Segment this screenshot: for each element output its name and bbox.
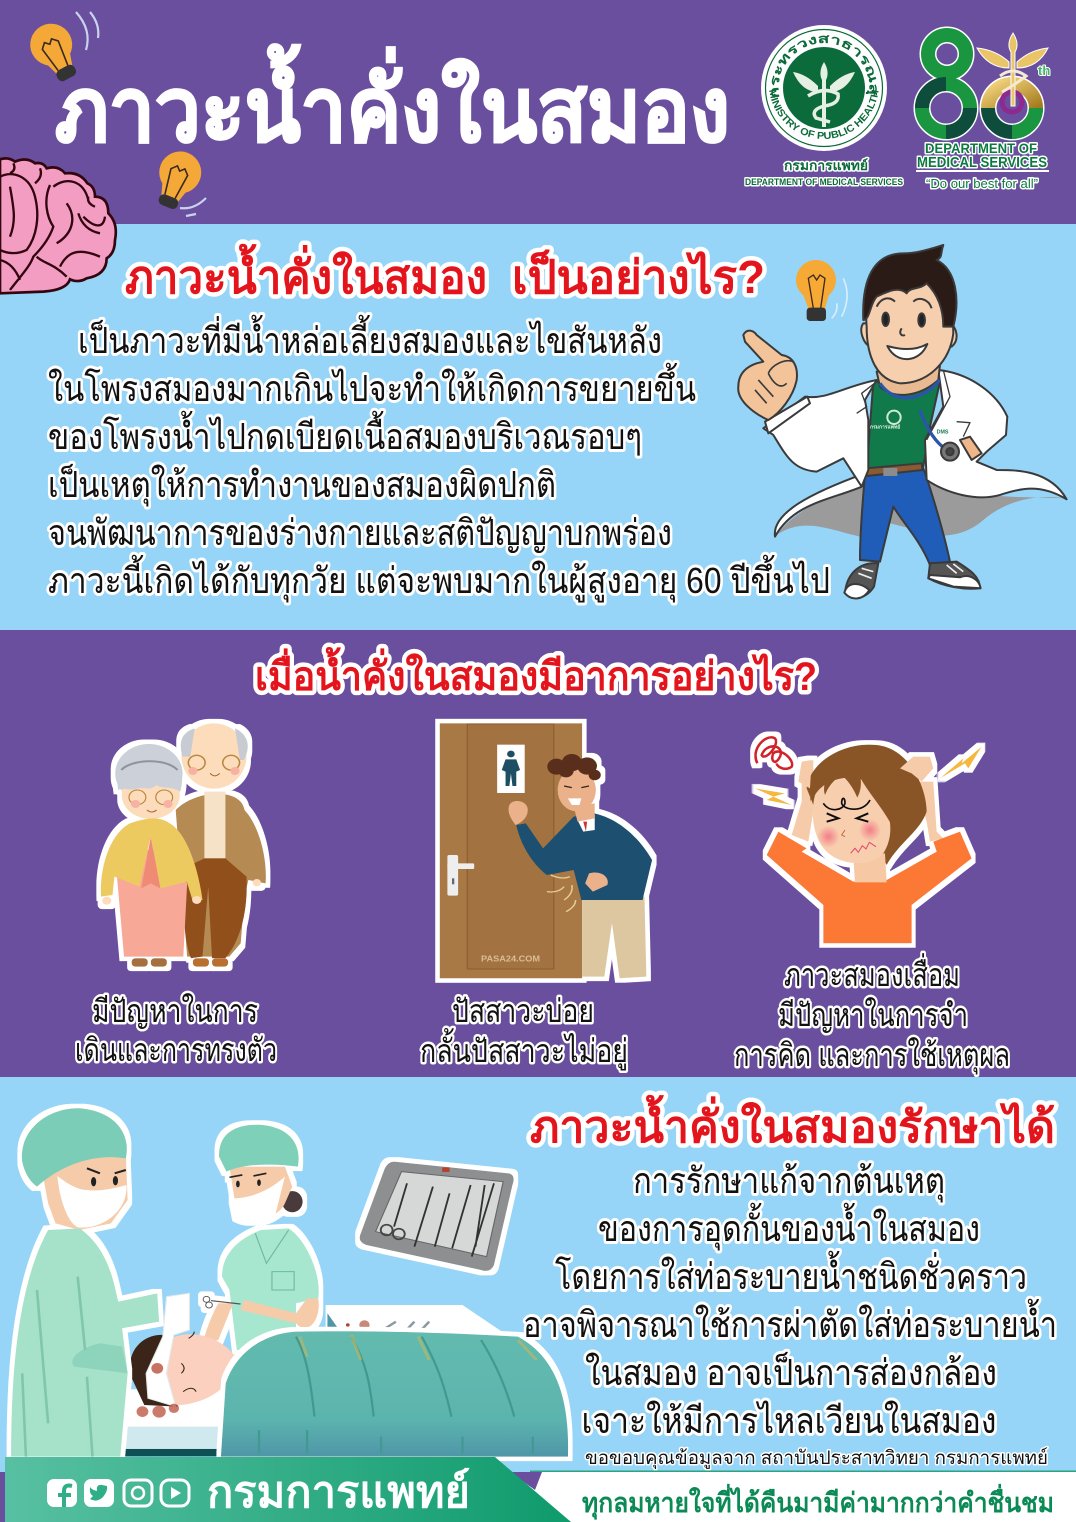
- background: what-is panel: [0, 224, 1076, 630]
- caption: dementia: ภาวะสมองเสื่อม: [784, 953, 960, 993]
- surgical tray: [360, 1162, 514, 1271]
- footer: purple accent: [0, 1472, 542, 1522]
- footer: white band: [505, 1472, 1076, 1522]
- logo: 80th anniversary: DEPARTMENT OF: [925, 140, 1037, 156]
- logo: 80th anniversary: “Do our best for all”: [926, 176, 1038, 191]
- illustration: man at toilet door: [440, 723, 652, 978]
- heading: what is hydrocephalus: ภาวะน้ำคั่งในสมอง: [125, 243, 487, 303]
- drape: [221, 1331, 568, 1457]
- logo: 80th anniversary: [916, 33, 1050, 191]
- heading: what is hydrocephalus: เป็นอย่างไร?: [512, 249, 765, 303]
- illustration: doctor mascot with bulb: กรมการแพทย์: [870, 423, 900, 430]
- text block: description: จนพัฒนาการของร่างกายและสติปัญญาบกพร่อง: [48, 512, 672, 553]
- illustration: doctor mascot with bulb: DMS: [937, 429, 949, 435]
- heading: what is hydrocephalus: [125, 243, 765, 303]
- text block: description: เป็นเหตุให้การทำงานของสมองผิดปกติ: [48, 462, 556, 507]
- text block: treatment: ของการอุดกั้นของน้ำในสมอง: [598, 1202, 980, 1251]
- caption: balance problems: เดินและการทรงตัว: [75, 1032, 277, 1068]
- text block: treatment: เจาะให้มีการไหลเวียนในสมอง: [582, 1400, 996, 1441]
- footer: green banner: [5, 1457, 571, 1522]
- background: treatment panel: [0, 1077, 1076, 1472]
- heading: what symptoms: เมื่อน้ำคั่งในสมองมีอาการอย่างไร?: [255, 647, 817, 699]
- icons: social media: [47, 1479, 189, 1507]
- text block: treatment: การรักษาแก้จากต้นเหตุ: [633, 1160, 945, 1203]
- caption: dementia: [734, 953, 1010, 1075]
- logo: 80th anniversary: MEDICAL SERVICES: [917, 154, 1047, 171]
- illustration: doctor mascot with bulb: [738, 245, 1067, 599]
- caption: dementia: การคิด และการใช้เหตุผล: [734, 1037, 1010, 1075]
- text block: description: เป็นภาวะที่มีน้ำหล่อเลี้ยงสมองและไขสันหลัง: [78, 314, 662, 361]
- nurse: [203, 1125, 319, 1350]
- logo: ministry of public health seal: DEPARTMENT OF MEDICAL SERVICES: [745, 177, 903, 188]
- caption: urination: [420, 993, 628, 1071]
- caption: urination: ปัสสาวะบ่อย: [452, 993, 594, 1029]
- text block: description: ภาวะนี้เกิดได้กับทุกวัย แต่จะพบมากในผู้สูงอายุ 60 ปีขึ้นไป: [48, 554, 830, 603]
- caption: balance problems: [75, 993, 277, 1068]
- background: symptoms panel: [0, 630, 1076, 1077]
- icon: light bulb by doctor: [796, 260, 847, 321]
- logo: ministry of public health seal: MINISTRY OF PUBLIC HEALTH: [769, 90, 879, 139]
- bed: [98, 1387, 222, 1456]
- door: PASA24.COM: [481, 954, 540, 963]
- text block: description: ของโพรงน้ำไปกดเบียดเนื้อสมองบริเวณรอบๆ: [48, 410, 642, 457]
- man: [509, 754, 652, 978]
- patient head: [129, 1293, 236, 1418]
- logo: ministry of public health seal: [744, 25, 904, 188]
- text block: description: [48, 314, 830, 603]
- logo: 80th anniversary: th: [1038, 63, 1050, 78]
- footer name: กรมการแพทย์: [207, 1467, 470, 1517]
- title: ภาวะน้ำคั่งในสมอง: [55, 44, 730, 161]
- background: header band: [0, 0, 1076, 224]
- door: [440, 723, 582, 978]
- illustration: woman with headache: [755, 737, 982, 943]
- icon: light bulb top left: [23, 0, 119, 88]
- icon: light bulb under title: [146, 145, 225, 225]
- logo: ministry of public health seal: กรมการแพทย์: [784, 158, 868, 173]
- icon: pink brain: [0, 158, 116, 293]
- heading: treatable: ภาวะน้ำคั่งในสมองรักษาได้: [530, 1094, 1055, 1152]
- text block: treatment: [523, 1160, 1057, 1441]
- text block: treatment: ในสมอง อาจเป็นการส่องกล้อง: [585, 1350, 997, 1393]
- caption: urination: กลั้นปัสสาวะไม่อยู่: [420, 1028, 628, 1071]
- caption: dementia: มีปัญหาในการจำ: [778, 997, 968, 1033]
- surgeon: [11, 1108, 159, 1457]
- instrument table: [326, 1305, 507, 1335]
- caption: balance problems: มีปัญหาในการ: [92, 993, 258, 1029]
- text block: description: ในโพรงสมองมากเกินไปจะทำให้เกิดการขยายขึ้น: [48, 362, 696, 409]
- credit line: ขอขอบคุณข้อมูลจาก สถาบันประสาทวิทยา กรมการแพทย์: [585, 1447, 1048, 1470]
- illustration: surgery scene: [11, 1108, 568, 1457]
- illustration: elderly couple: [101, 723, 266, 967]
